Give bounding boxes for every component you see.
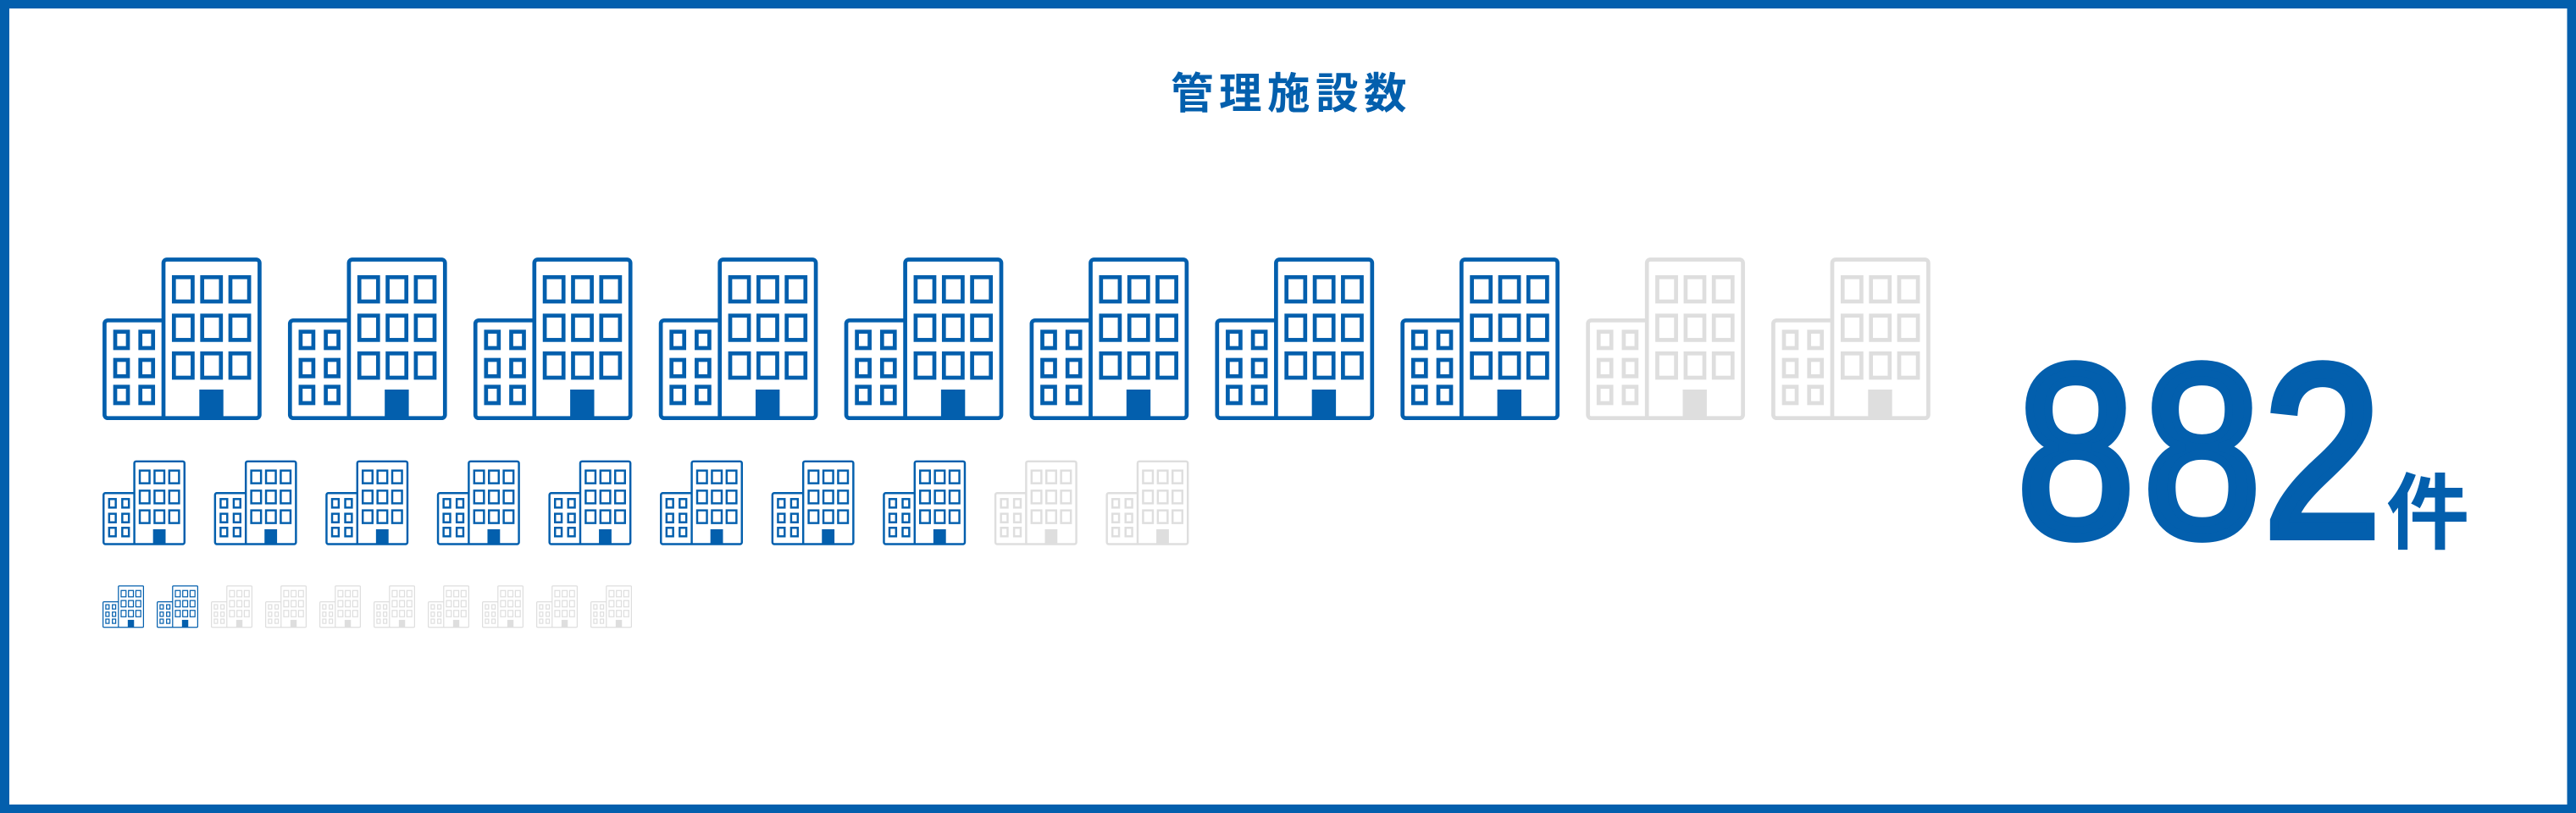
- icon: building 7: [1217, 259, 1372, 418]
- icon: medium building 4: [438, 462, 519, 545]
- icon: medium building 3: [326, 462, 407, 545]
- icon: medium building 2: [215, 462, 296, 545]
- icon: small building 2: [158, 586, 197, 628]
- icon: building 9 inactive: [1588, 259, 1743, 418]
- row: small building icons: [103, 586, 631, 628]
- icon: small building 9 inactive: [537, 586, 577, 628]
- icon: building 2: [290, 259, 445, 418]
- icon: medium building 1: [103, 462, 185, 545]
- icon: small building 6 inactive: [374, 586, 414, 628]
- icon: small building 8 inactive: [483, 586, 523, 628]
- icon: building 8: [1403, 259, 1558, 418]
- icon: small building 1: [103, 586, 143, 628]
- icon: building 3: [475, 259, 630, 418]
- title: 管理施設数: [1171, 69, 1412, 118]
- icon: small building 10 inactive: [591, 586, 631, 628]
- icon: small building 5 inactive: [320, 586, 360, 628]
- row: large building icons: [104, 259, 1928, 418]
- icon: medium building 7: [773, 462, 853, 545]
- icon: small building 7 inactive: [429, 586, 468, 628]
- icon: building 10 inactive: [1773, 259, 1928, 418]
- icon: building 6: [1032, 259, 1187, 418]
- icon: medium building 10 inactive: [1107, 462, 1188, 545]
- icon: medium building 9 inactive: [995, 462, 1077, 545]
- icon: small building 3 inactive: [212, 586, 252, 628]
- total count: 882 件: 2: [2263, 315, 2381, 589]
- icon: medium building 5: [550, 462, 630, 545]
- icon: building 5: [846, 259, 1001, 418]
- icon: medium building 6: [661, 462, 742, 545]
- total count: 882 件: 8: [2017, 315, 2135, 589]
- icon: building 4: [661, 259, 816, 418]
- row: medium building icons: [103, 462, 1188, 545]
- icon: medium building 8: [884, 462, 965, 545]
- total count: 882 件: 8: [2143, 315, 2261, 589]
- icon: building 1: [104, 259, 259, 418]
- total count: 882 件: 件: [2386, 467, 2469, 560]
- icon: small building 4 inactive: [266, 586, 306, 628]
- total count: 882 件: [2017, 315, 2469, 589]
